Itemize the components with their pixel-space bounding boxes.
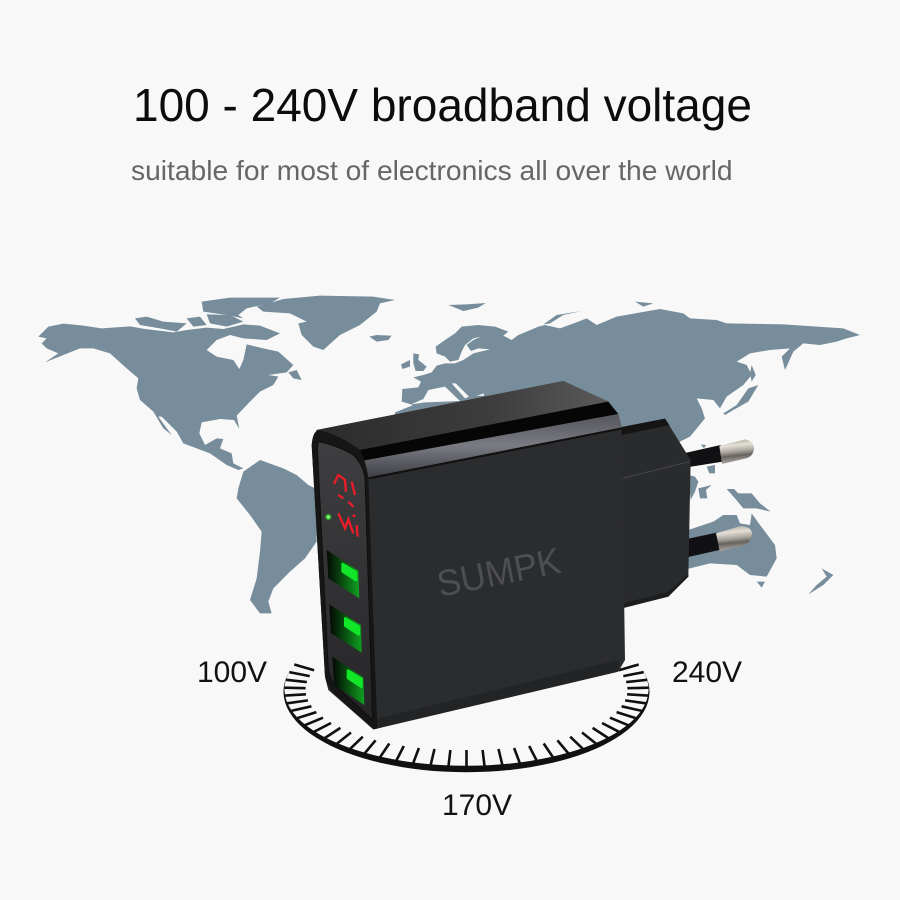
plug pin: top: [683, 439, 754, 467]
subtitle: suitable for most of electronics all over the world: [131, 154, 733, 186]
map: Mediterranean and Black Sea: [411, 383, 484, 404]
world map: [38, 296, 860, 613]
map: British Isles: [401, 303, 486, 404]
green status dot: [325, 513, 332, 521]
title: 100 - 240V broadband voltage: [133, 79, 752, 131]
red LED digits: [334, 475, 358, 537]
dial: outer arc: [284, 664, 650, 772]
label: 100V: 100V: [197, 656, 267, 689]
charger body: [312, 381, 625, 729]
brand text on charger: SUMPK: [433, 539, 564, 605]
label: 240V: 240V: [672, 656, 742, 689]
dial: tick marks right: [285, 664, 450, 768]
dial: tick marks left: [466, 664, 648, 768]
charger: [312, 381, 754, 729]
label: 170V: 170V: [442, 789, 512, 822]
plug housing: [620, 419, 691, 608]
USB port 3: [332, 657, 364, 705]
front panel with display and ports: [312, 430, 377, 729]
dial: voltage scale arc: [284, 664, 650, 772]
map: the Americas and Greenland: [38, 296, 395, 613]
USB port 1: [327, 550, 359, 598]
map: Africa sliver: [395, 400, 470, 428]
USB port 2: [329, 604, 362, 653]
plug pin: bottom: [685, 526, 752, 557]
map: Eurasia, Africa and Oceania: [395, 302, 860, 594]
